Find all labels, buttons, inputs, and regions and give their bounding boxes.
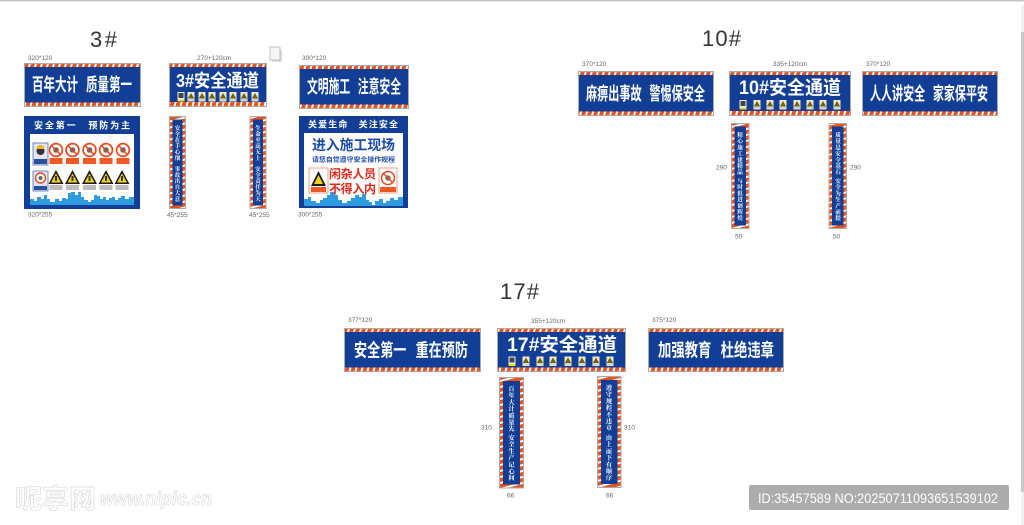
panel: 进入施工现场 <box>299 116 408 208</box>
banner: 3#安全通道 <box>169 63 267 107</box>
watermark: site logo: www.nipic.cn <box>100 489 212 510</box>
size label: 320*255 <box>28 212 53 218</box>
icon: worker helmet sign <box>33 143 48 165</box>
group: 17# signs <box>344 317 784 500</box>
panel: 安全第一 预防为主 <box>24 116 140 209</box>
size label: 377*120 <box>348 317 373 324</box>
pillar: 遵守规程不违章 由上而下有顺序 <box>597 376 622 488</box>
size label: 335+120cm <box>773 61 807 68</box>
banner: 麻痹出事故 警惕保安全 <box>578 71 714 116</box>
size label: 300*120 <box>302 55 327 62</box>
group: 3# signs <box>24 47 409 219</box>
heading: 17#: 17# <box>500 279 540 304</box>
banner: 加强教育 杜绝违章: 加强教育 杜绝违章 <box>658 340 774 360</box>
watermark: site logo: 昵享网 <box>15 484 96 514</box>
size label: 45*255 <box>167 212 188 219</box>
size label: 66 <box>606 492 614 500</box>
banner: 安全第一 重在预防 <box>344 328 481 372</box>
size label: 66 <box>507 492 515 500</box>
icon: warning box <box>309 168 328 193</box>
pillar: 百年大计质量先 安全生产记心间 <box>499 377 524 488</box>
size label: 45*255 <box>249 212 270 219</box>
pillar: 生命至高无上 安全责任为天: 生命至高无上安全责任为天 <box>255 124 261 203</box>
banner: 文明施工 注意安全: 文明施工 注意安全 <box>307 76 401 97</box>
heading: 10#: 10# <box>702 26 742 51</box>
size label: 310 <box>624 424 635 432</box>
size label: 320*120 <box>28 55 53 62</box>
scrollbar <box>1021 5 1024 525</box>
panel: 安全第一 预防为主: 安全第一 预防为主 <box>34 120 130 130</box>
page top edge <box>0 0 1024 2</box>
skyline <box>304 192 403 206</box>
pillar: 百年大计质量先 安全生产记心间: 百年大计质量先安全生产记心间 <box>508 385 515 482</box>
size label: 370*120 <box>866 61 891 68</box>
banner: 百年大计 质量第一: 百年大计 质量第一 <box>32 74 132 95</box>
banner: 17#安全通道 <box>497 328 626 372</box>
pillar: 安全在手心细 事故出自大意: 安全在手心细事故出自大意 <box>175 124 181 203</box>
banner: 3#安全通道: 3#安全通道 <box>176 70 259 91</box>
size label: 270+120cm <box>197 55 231 62</box>
banner: 百年大计 质量第一 <box>24 63 141 107</box>
icons: prohibition signs row <box>50 144 130 164</box>
panel: 进入施工现场: 不得入内 <box>329 181 376 196</box>
size label: 375*120 <box>652 317 677 324</box>
size label: 310 <box>481 424 492 432</box>
panel: 进入施工现场: 请您自觉遵守安全操作规程 <box>312 154 396 164</box>
banner: 10#安全通道 <box>729 71 851 116</box>
banner: 人人讲安全 家家保平安 <box>862 71 998 116</box>
heading: 3#: 3# <box>90 27 118 52</box>
banner: 10#安全通道: 10#安全通道 <box>739 76 841 99</box>
size label: 355+120cm <box>531 318 565 325</box>
banner: 安全第一 重在预防: 安全第一 重在预防 <box>354 340 468 360</box>
watermark: site logo <box>15 484 212 514</box>
icons: warning triangles row <box>48 170 130 190</box>
icons: warning strip <box>508 356 614 366</box>
image id badge <box>749 485 1009 510</box>
icon: document copy <box>270 47 282 62</box>
banner: 17#安全通道: 17#安全通道 <box>507 333 617 356</box>
pillar: 质量是安全基石 安全为生产前提: 质量是安全基石安全为生产前提 <box>835 131 841 222</box>
skyline <box>30 192 134 205</box>
icon: prohibition box <box>379 168 397 193</box>
group: 10# signs <box>578 61 998 240</box>
banner: 麻痹出事故 警惕保安全: 麻痹出事故 警惕保安全 <box>586 83 705 104</box>
pillar: 生命至高无上 安全责任为天 <box>250 116 266 209</box>
panel: 进入施工现场: 进入施工现场 <box>312 137 395 153</box>
icons: warning strip <box>178 92 258 102</box>
panel: 进入施工现场: 关爱生命 关注安全 <box>308 118 398 130</box>
icons: warning strip <box>740 100 840 110</box>
size label: 370*120 <box>582 61 607 68</box>
size label: 50 <box>735 234 743 240</box>
image id badge: ID:35457589 NO:20250711093651539102 <box>758 491 998 506</box>
pillar: 精心施工建精品 与时俱进创辉煌: 精心施工建精品与时俱进创辉煌 <box>736 131 744 222</box>
pillar: 遵守规程不违章 由上而下有顺序: 遵守规程不违章由上而下有顺序 <box>606 384 613 482</box>
banner: 文明施工 注意安全 <box>299 65 409 109</box>
size label: 290 <box>850 164 861 172</box>
size label: 300*255 <box>298 212 323 218</box>
size label: 290 <box>716 164 727 172</box>
banner: 加强教育 杜绝违章 <box>648 328 784 372</box>
pillar: 质量是安全基石 安全为生产前提 <box>828 123 847 229</box>
icon: small prohibition sign box <box>33 171 48 191</box>
pillar: 精心施工建精品 与时俱进创辉煌 <box>731 123 750 229</box>
panel: 进入施工现场: 闲杂人员 <box>329 166 376 181</box>
size label: 50 <box>833 234 841 240</box>
pillar: 安全在手心细 事故出自大意 <box>169 116 186 209</box>
